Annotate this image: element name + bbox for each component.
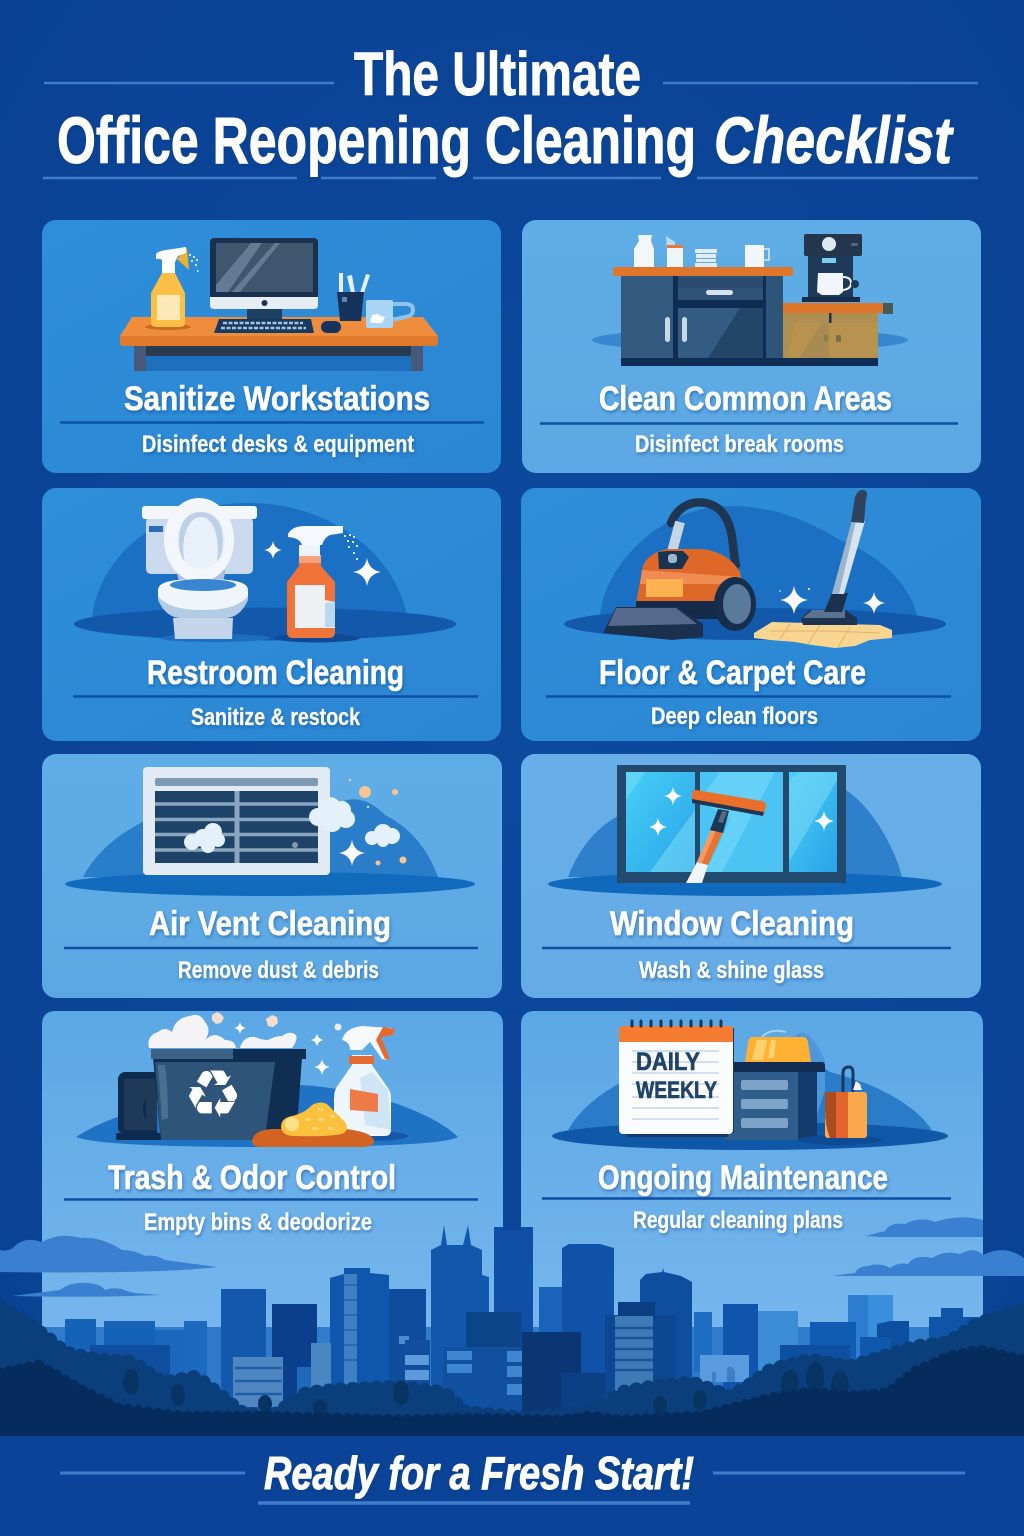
panel: restroom cleaning: Sanitize & restock — [191, 704, 361, 731]
clouds — [0, 1217, 1024, 1297]
panel: trash and odor control: Empty bins & deodorize — [144, 1209, 372, 1236]
horizon haze — [42, 1327, 983, 1427]
icon: air vent with dust clouds — [65, 767, 475, 896]
panel: clean common areas: Clean Common Areas — [599, 380, 892, 418]
tree line front layer — [0, 1350, 1024, 1450]
icon: recycling bin, sponge and spray bottle — [76, 1012, 458, 1147]
trees mid layer — [123, 1362, 849, 1417]
panel: restroom cleaning: Restroom Cleaning — [147, 654, 404, 692]
panel: air vent cleaning: Remove dust & debris — [178, 957, 379, 984]
panel: sanitize workstations: Sanitize Workstations — [124, 380, 430, 418]
panel: clean common areas: Disinfect break rooms — [635, 431, 844, 458]
panel: trash and odor control — [42, 1011, 503, 1400]
panel: ongoing maintenance — [521, 1011, 983, 1400]
icon: daily weekly calendar, supply box and caddy: DAILY — [636, 1048, 700, 1076]
footer band — [0, 1436, 1024, 1536]
sky — [42, 1240, 983, 1436]
panel: air vent cleaning — [42, 754, 502, 998]
title block — [43, 40, 978, 178]
central gap above tower — [503, 1011, 521, 1241]
panel: window cleaning — [521, 754, 981, 998]
panel: window cleaning: Wash & shine glass — [639, 957, 824, 984]
panel: sanitize workstations — [42, 220, 501, 473]
icon: window and squeegee — [548, 765, 942, 896]
panel: restroom cleaning — [42, 488, 501, 741]
icon: desk with computer and spray bottle — [120, 238, 438, 371]
skyline scene: sky, clouds, buildings and trees — [0, 1011, 1024, 1450]
title block: The Ultimate — [354, 40, 641, 108]
panel: ongoing maintenance: Regular cleaning plans — [633, 1207, 843, 1234]
icon: daily weekly calendar, supply box and caddy — [552, 1021, 948, 1150]
panel: air vent cleaning: Air Vent Cleaning — [149, 905, 391, 943]
panel: floor and carpet care: Deep clean floors — [651, 703, 818, 730]
panel: sanitize workstations: Disinfect desks & equipment — [142, 431, 414, 458]
title block: Office Reopening Cleaning — [57, 103, 696, 177]
title block: Checklist — [714, 103, 954, 177]
panel: ongoing maintenance: Ongoing Maintenance — [598, 1159, 888, 1197]
icon: recycling bin, sponge and spray bottle: ♻ — [183, 1056, 243, 1133]
footer slogan: Ready for a Fresh Start! — [264, 1447, 694, 1499]
icon: vacuum cleaner and mop — [564, 490, 946, 648]
panel: window cleaning: Window Cleaning — [610, 905, 854, 943]
panel: trash and odor control: Trash & Odor Control — [108, 1159, 396, 1197]
panel: clean common areas — [522, 220, 981, 473]
panel: floor and carpet care: Floor & Carpet Care — [599, 654, 866, 692]
tree line back layer — [0, 1300, 1024, 1450]
icon: break room cabinets and coffee machine — [592, 234, 908, 366]
icon: daily weekly calendar, supply box and caddy: WEEKLY — [636, 1077, 717, 1104]
panel: floor and carpet care — [521, 488, 981, 741]
distant buildings — [207, 1295, 893, 1401]
towers — [65, 1180, 983, 1417]
icon: toilet and orange spray bottle — [74, 498, 456, 642]
